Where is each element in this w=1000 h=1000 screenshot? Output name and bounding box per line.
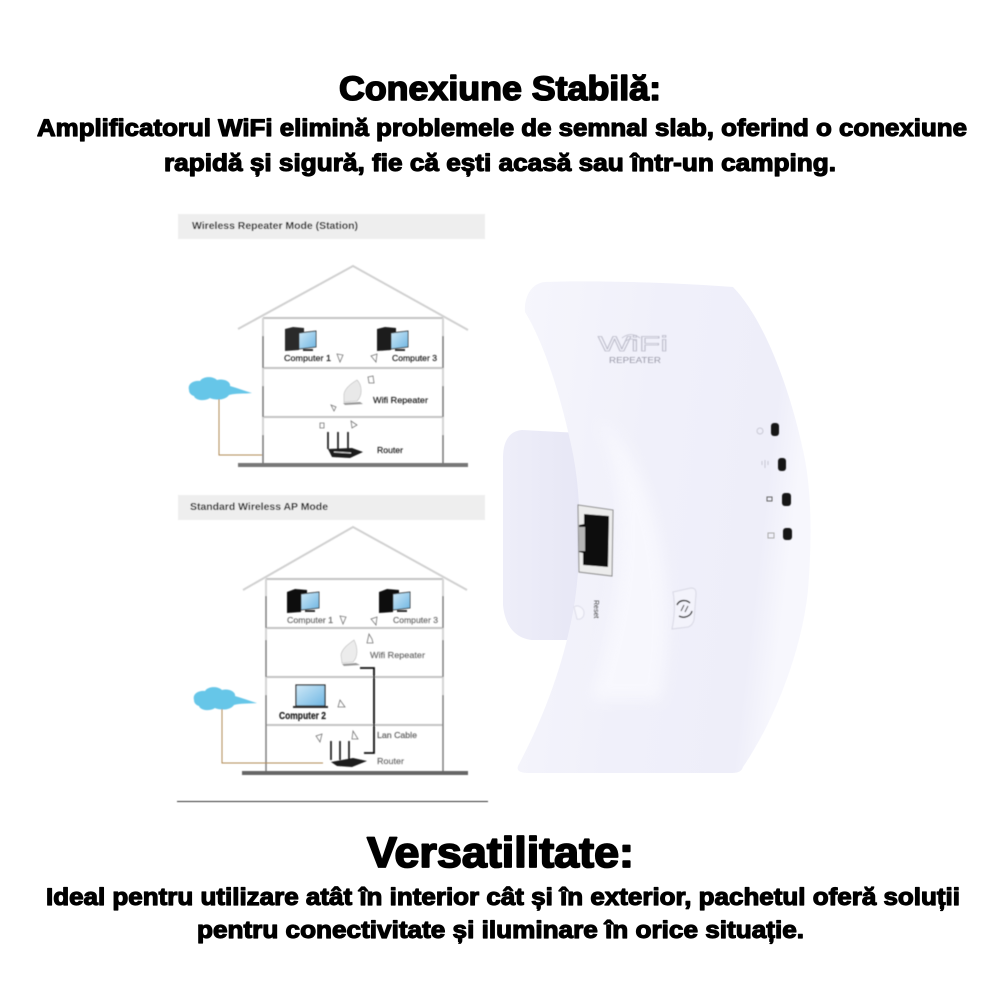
heading: Versatilitate: Versatilitate: (367, 829, 634, 877)
icon: signal marks (320, 354, 377, 428)
reset button and label: Reset (592, 600, 599, 618)
icon: internet cloud (194, 687, 257, 710)
icon: WiFi repeater (343, 380, 363, 405)
icon: router (328, 432, 363, 458)
panel: Standard Wireless AP Mode diagram (177, 495, 488, 802)
label: Computer 1: Computer 1 (284, 353, 331, 363)
panel header: Wireless Repeater Mode (178, 214, 485, 239)
connector: internet wire (219, 399, 262, 455)
status LEDs (771, 423, 792, 540)
panel header: Standard Wireless AP Mode: Standard Wireless AP Mode (190, 502, 328, 513)
label: Wifi Repeater: Wifi Repeater (370, 650, 425, 660)
label: Lan Cable: Lan Cable (377, 730, 417, 740)
icon: computer 1 (285, 327, 316, 351)
icon: computer 1 (287, 589, 319, 613)
icon: WiFi repeater (341, 640, 360, 666)
back plug block (503, 430, 590, 640)
icon: computer 3 (377, 327, 408, 351)
panel header: Standard Wireless AP Mode (178, 495, 485, 520)
heading: Conexiune Stabilă: Conexiune Stabilă: (339, 70, 661, 108)
icon: router (331, 741, 367, 767)
text block: Versatilitate description: pentru conectivitate și iluminare în orice situație. (197, 917, 804, 944)
house outline (238, 266, 468, 467)
icon: signal marks (316, 616, 377, 742)
LAN port (578, 505, 613, 576)
label: Computer 2: Computer 2 (279, 711, 326, 722)
product photo: WiFi repeater (503, 281, 811, 773)
icon: computer 3 (379, 589, 410, 613)
panel header: Wireless Repeater Mode: Wireless Repeater Mode (Station) (192, 221, 358, 232)
body highlight (590, 420, 668, 700)
text block: Conexiune Stabilă description (37, 115, 967, 177)
text block: Conexiune Stabilă description: rapidă și sigură, fie că ești acasă sau într-un camping. (164, 150, 836, 177)
connector: LAN cable (360, 668, 374, 753)
connector: internet wire (222, 709, 323, 763)
divider (177, 801, 488, 802)
logo: WiFi Repeater: REPEATER (609, 356, 661, 365)
logo: WiFi Repeater (598, 333, 668, 365)
house outline (242, 527, 468, 775)
reset button and label (574, 600, 599, 619)
text block: Versatilitate description (46, 884, 960, 944)
label: Router: Router (377, 756, 404, 766)
LED icons (757, 428, 774, 538)
WPS button (672, 588, 696, 629)
label: Computer 1: Computer 1 (287, 615, 333, 625)
text block: Versatilitate description: Ideal pentru utilizare atât în interior cât și în exterior, pachetul oferă soluții (46, 884, 960, 911)
icon: laptop (293, 685, 328, 708)
icon: internet cloud (189, 377, 252, 400)
label: Computer 3: Computer 3 (393, 615, 438, 625)
label: Computer 3: Computer 3 (392, 353, 437, 363)
logo: WiFi Repeater: WiFi (598, 333, 668, 356)
device body (518, 281, 811, 773)
label: Wifi Repeater: Wifi Repeater (373, 395, 428, 405)
text block: Conexiune Stabilă description: Amplificatorul WiFi elimină problemele de semnal slab, oferind o conexiune (37, 115, 967, 142)
panel: Wireless Repeater Mode diagram (178, 214, 485, 467)
label: Router: Router (377, 445, 403, 455)
